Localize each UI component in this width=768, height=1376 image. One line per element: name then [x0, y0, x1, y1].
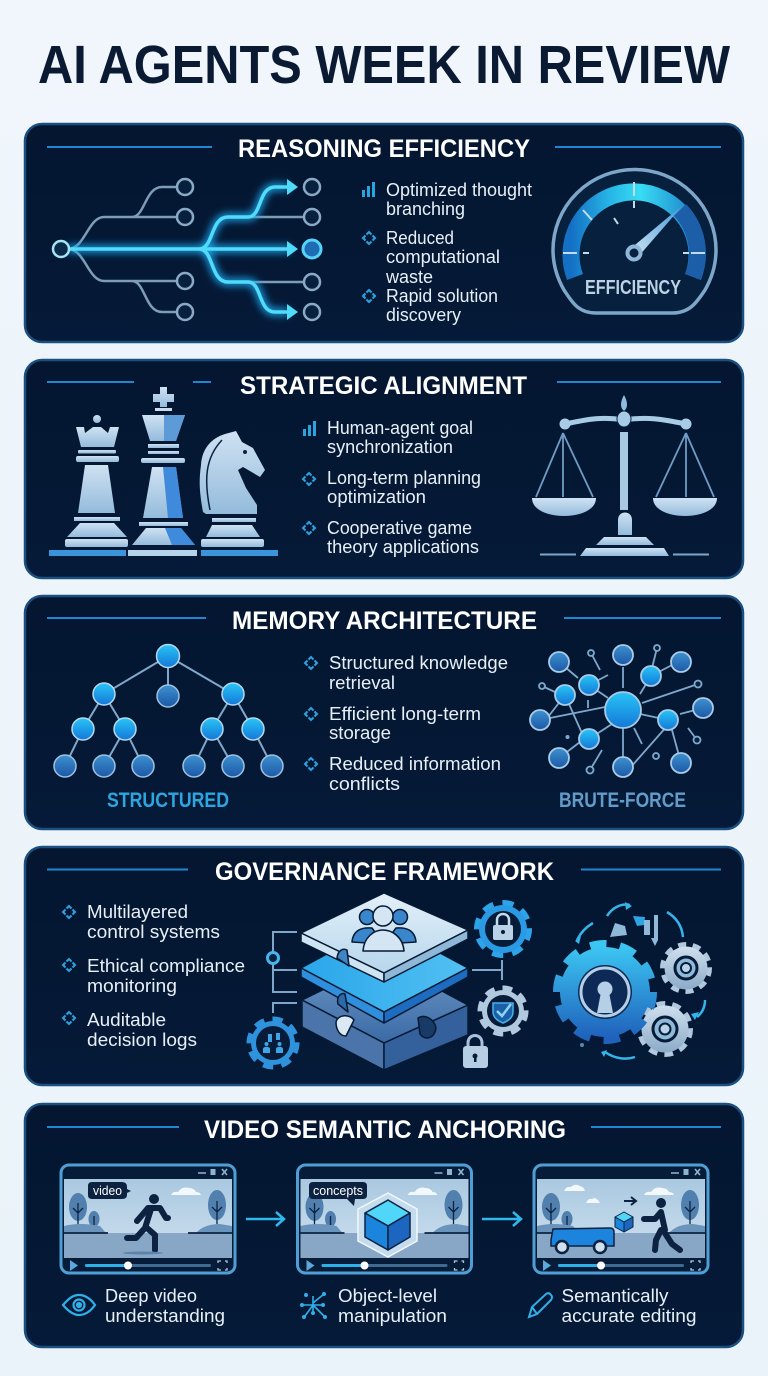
panel: strategic alignment: [25, 360, 743, 578]
bullet list: Efficient long-term: [329, 704, 481, 724]
arrow: [246, 1212, 284, 1226]
middle layer: [301, 923, 468, 1023]
callout: video: video: [93, 1183, 122, 1198]
bullet list: Structured knowledge: [329, 653, 508, 673]
icon: gears cluster: [559, 902, 708, 1059]
bullet list: conflicts: [329, 774, 400, 794]
branching decision tree diagram: [53, 179, 321, 320]
heading: reasoning efficiency: REASONING EFFICIENCY: [238, 135, 530, 163]
standing figure: [644, 1198, 680, 1250]
panel: memory architecture: [25, 596, 743, 829]
icon: eye: [63, 1295, 95, 1315]
video frame: concepts: [298, 1165, 472, 1273]
bullet list: Auditable: [87, 1010, 166, 1030]
bullet list: computational: [386, 247, 500, 267]
car: [551, 1228, 614, 1253]
video frame: runner: [61, 1165, 235, 1273]
icon: lock gear: [478, 904, 528, 954]
clouds: [564, 1185, 600, 1203]
bullet list: theory applications: [327, 537, 479, 557]
bullet list: waste: [385, 267, 433, 287]
heading: video semantic anchoring: VIDEO SEMANTIC ANCHORING: [204, 1116, 566, 1144]
bullet list: synchronization: [327, 437, 453, 457]
bullet list: [303, 418, 481, 557]
bullet list: [63, 902, 245, 1050]
icon: efficiency gauge: [553, 170, 716, 313]
caption: semantically accurate editing: Semantically: [562, 1286, 668, 1306]
bullet list: [362, 180, 532, 325]
icon: padlock: [463, 1036, 488, 1068]
caption: object-level manipulation: Object-level: [338, 1286, 437, 1306]
rook: [65, 415, 128, 547]
caption: deep video understanding: Deep video: [105, 1286, 197, 1306]
bullet list: Reduced information: [329, 754, 501, 774]
heading: governance framework: GOVERNANCE FRAMEWORK: [215, 858, 554, 886]
small arrow: [624, 1197, 636, 1205]
icon: chess pieces: [49, 387, 278, 556]
network diagram: brute-force: [530, 645, 713, 777]
bullet list: discovery: [386, 305, 461, 325]
icon: users: [352, 906, 416, 951]
bullet list: monitoring: [87, 976, 177, 996]
caption: object-level manipulation: manipulation: [338, 1306, 447, 1326]
label: brute-force: BRUTE-FORCE: [559, 789, 686, 812]
tree diagram: structured: [54, 644, 283, 777]
bullet list: Human-agent goal: [327, 418, 473, 438]
icon: team gear: [250, 1020, 296, 1066]
panel: reasoning efficiency: [25, 124, 743, 342]
icon: efficiency gauge: EFFICIENCY: [585, 277, 682, 299]
small cube: [615, 1212, 633, 1232]
bullet list: Long-term planning: [327, 468, 481, 488]
callout: concepts: concepts: [313, 1183, 363, 1198]
heading: memory architecture: MEMORY ARCHITECTURE: [232, 607, 537, 635]
bullet list: [305, 653, 508, 794]
arrow: [482, 1212, 521, 1226]
caption: semantically accurate editing: accurate editing: [562, 1306, 696, 1326]
bottom layer: [302, 960, 468, 1070]
heading: strategic alignment: STRATEGIC ALIGNMENT: [240, 372, 527, 400]
caption: semantically accurate editing: [529, 1286, 696, 1326]
icon: balance scale: [532, 395, 717, 556]
bullet list: Rapid solution: [386, 286, 498, 306]
label: structured: STRUCTURED: [107, 789, 229, 812]
icon: cube: [358, 1193, 417, 1257]
top layer: [301, 893, 468, 982]
bullet list: Ethical compliance: [87, 956, 245, 976]
bullet list: Optimized thought: [386, 180, 532, 200]
bullet list: branching: [386, 199, 465, 219]
king: [132, 387, 195, 545]
panel: video semantic anchoring: [25, 1104, 743, 1347]
connector lines: [268, 932, 502, 1013]
icon: stacked isometric layers: [301, 893, 468, 1070]
caption: deep video understanding: [63, 1286, 225, 1326]
bullet list: control systems: [87, 922, 220, 942]
caption: object-level manipulation: [300, 1286, 447, 1326]
runner figure: [123, 1194, 168, 1254]
icon: shield gear: [481, 989, 525, 1033]
callout: concepts: [309, 1182, 367, 1206]
callout: video: [88, 1182, 131, 1199]
panel: governance framework: [25, 847, 743, 1085]
bullet list: Reduced: [386, 228, 454, 248]
video frame: edited scene: [534, 1165, 708, 1273]
icon: network: [300, 1292, 327, 1319]
bullet list: Multilayered: [87, 902, 188, 922]
bullet list: decision logs: [87, 1030, 197, 1050]
knight: [200, 431, 265, 547]
bullet list: optimization: [327, 487, 426, 507]
base bars: [49, 550, 278, 556]
bullet list: retrieval: [329, 673, 395, 693]
bullet list: storage: [329, 723, 391, 743]
caption: deep video understanding: understanding: [105, 1306, 225, 1326]
icon: pencil: [529, 1293, 552, 1317]
bullet list: Cooperative game: [327, 518, 472, 538]
